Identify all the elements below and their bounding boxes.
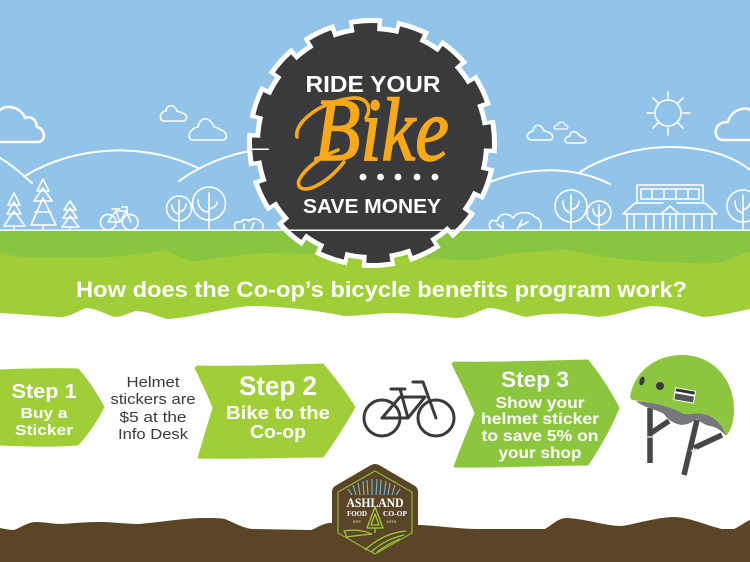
tree 3 trunk [563,195,579,230]
helmet vent 2 [656,382,664,390]
logo inner border [338,471,412,554]
helmet sticker [673,387,696,404]
gear outline [232,3,512,283]
step 1 text line 1: Buy a [20,405,68,422]
step 1 arrow [0,369,104,446]
step 2 title: Step 2 [239,371,317,401]
step 3 text line 3: to save 5% on [482,428,598,445]
sticker price note: Helmet [126,374,180,391]
step 3 text line 1: Show your [496,395,584,412]
step 2 text line 1: Bike to the [226,402,330,423]
badge text: bike: Bike [314,81,449,180]
helmet vent 1 [638,376,646,386]
cloud: far left [0,107,44,142]
logo year: 1979 [386,519,397,524]
round tree 4 [587,201,611,225]
step 1 text line 2: Sticker [15,422,73,439]
left hill line crossing the gear [250,148,269,150]
helmet strap buckles [647,437,697,451]
step 3 arrow [452,360,619,467]
step 2 text line 2: Co-op [250,421,306,442]
scenery: left line art [0,106,263,230]
hill lines right [490,147,750,184]
brown ground [0,517,750,562]
logo: Ashland Food Co-op [332,464,418,559]
sticker price note: Info Desk [118,426,189,443]
icon: bicycle [364,382,454,436]
cloud: small left [160,106,187,121]
bush right [489,213,541,230]
icon: helmet [630,355,734,475]
helmet straps [650,408,722,475]
step 3 text line 4: your shop [498,445,582,462]
logo hexagon [332,464,418,559]
lime heading band [0,250,750,319]
logo tree [367,507,383,533]
gear body [240,11,504,275]
cloud: medium left [189,119,226,140]
sky background [0,0,750,231]
sticker price note: stickers are [110,391,196,408]
badge dots [360,174,438,180]
logo name: ASHLAND [346,495,404,510]
step 2 arrow [195,364,355,458]
sun [647,92,690,135]
badge text: ride your: RIDE YOUR [306,71,441,97]
sticker price note: $5 at the [120,409,186,426]
horizon line [0,230,750,231]
tree 4 trunk [593,205,605,230]
pine tree 1 [4,193,25,230]
logo fields [344,530,406,552]
badge text: save money: SAVE MONEY [303,196,442,218]
round tree 2 [192,187,226,230]
sticker price note [110,374,196,443]
logo co-op: CO-OP [383,509,407,518]
swash of script word [297,98,369,189]
gear badge [232,3,512,283]
round tree 3 [555,190,587,222]
bush left [234,219,263,230]
cloud: small trio C [565,132,586,143]
hill lines left [0,150,255,183]
step 1 title: Step 1 [12,381,76,403]
cloud: small trio B [554,122,568,129]
step 3 title: Step 3 [501,367,569,392]
helmet liner [636,401,726,436]
cloud: far right [716,108,750,140]
co-op building [623,185,717,230]
cloud: small trio A [527,125,553,140]
pine tree 3 [62,201,79,230]
logo sun rays [348,479,400,495]
step 3 text line 2: helmet sticker [481,411,599,428]
pine tree 2 [31,179,56,230]
outline bicycle [100,207,138,230]
helmet shell [630,355,734,436]
heading: How does the Co-op’s bicycle benefits program work? [76,277,687,302]
tree 5 trunk [735,195,750,230]
scenery: right line art [489,92,750,230]
green grass band [0,230,750,270]
round tree 5 [727,190,750,222]
round tree 1 [166,196,192,230]
logo food: FOOD [347,509,368,518]
logo est: EST. [353,519,362,524]
